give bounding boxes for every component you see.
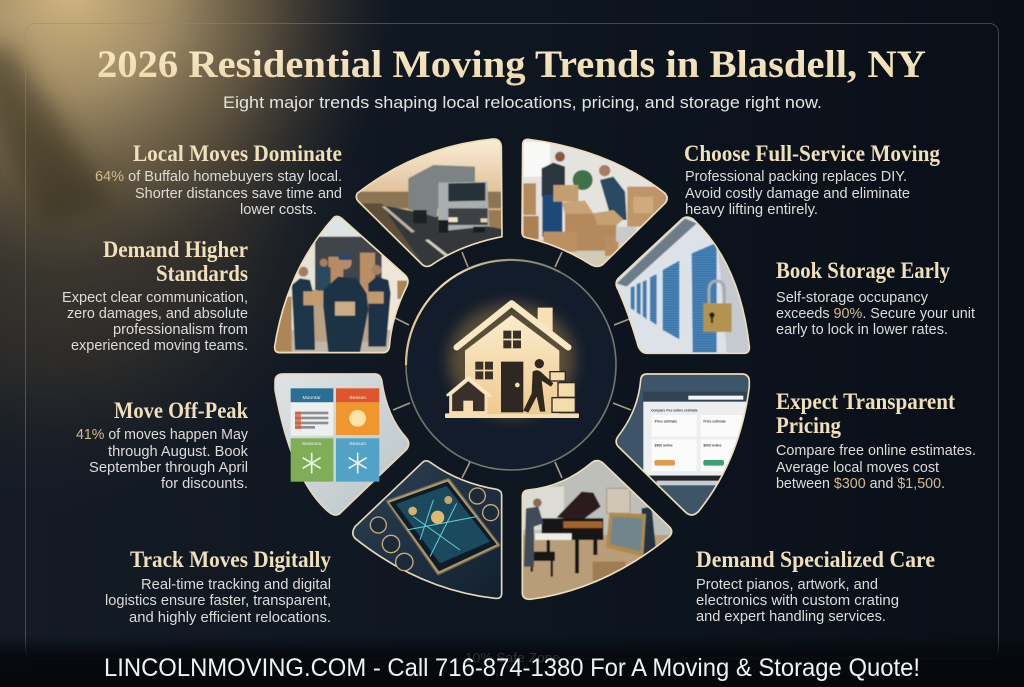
panel: seasonal calendar: Season	[349, 441, 366, 447]
text block: Local Moves Dominate	[95, 141, 342, 218]
panel: online estimates laptop: Compare free online estimate	[651, 408, 698, 412]
text block: Choose Full-Service Moving: Professional packing replaces DIY.	[685, 169, 907, 185]
faint safe zone label: 10% Safe Zone	[465, 650, 560, 665]
text block: Book Storage Early: exceeds 90%. Secure your unit	[776, 306, 975, 322]
text block: Choose Full-Service Moving: Avoid costly damage and eliminate	[685, 186, 910, 202]
panel: online estimates laptop: Price estimate	[703, 419, 726, 423]
text block: Demand Higher Standards: Standards	[156, 261, 248, 286]
text block: Demand Specialized Care: electronics with custom crating	[696, 593, 899, 609]
text block: Move Off-Peak: for discounts.	[161, 476, 248, 492]
text block: Expect Transparent Pricing: Pricing	[776, 413, 841, 438]
text block: Book Storage Early: early to lock in lower rates.	[776, 322, 948, 338]
text block: Demand Higher Standards: professionalism from	[113, 322, 248, 338]
footer band	[0, 635, 1024, 687]
central circle with connector spokes	[393, 252, 632, 478]
panel: seasonal calendar: Moontar	[303, 395, 321, 401]
panel: online estimates laptop	[613, 373, 753, 517]
text block: Book Storage Early	[776, 258, 975, 338]
text block: Track Moves Digitally: and highly efficient relocations.	[129, 610, 331, 626]
text block: Demand Specialized Care: Demand Specialized Care	[696, 547, 935, 572]
footer call to action: LINCOLNMOVING.COM - Call 716-874-1380 For A Moving & Storage Quote!	[104, 654, 920, 682]
text block: Choose Full-Service Moving: Choose Full-Service Moving	[684, 141, 940, 166]
text block: Demand Higher Standards: zero damages, and absolute	[67, 306, 248, 322]
text block: Expect Transparent Pricing: Expect Transparent	[776, 389, 955, 414]
text block: Choose Full-Service Moving	[684, 141, 940, 218]
text block: Demand Specialized Care: and expert handling services.	[696, 609, 886, 625]
stacked boxes	[550, 372, 575, 412]
text block: Expect Transparent Pricing: between $300 and $1,500.	[776, 476, 945, 492]
panel: seasonal calendar: Seasons	[302, 441, 322, 447]
mover figure	[523, 359, 553, 413]
text block: Demand Higher Standards: Demand Higher	[103, 237, 248, 262]
subtitle: Eight major trends shaping local relocations, pricing, and storage right now.	[223, 93, 822, 112]
text block: Track Moves Digitally: Real-time tracking and digital	[141, 577, 331, 593]
panel: packing photo	[520, 137, 670, 270]
text block: Move Off-Peak: 41% of moves happen May	[76, 427, 249, 443]
text block: Book Storage Early: Book Storage Early	[776, 258, 950, 283]
text block: Book Storage Early: Self-storage occupancy	[776, 290, 929, 306]
text block: Demand Higher Standards	[62, 237, 248, 354]
panel: moving crew photo	[273, 213, 412, 355]
panel: digital tracking tablet	[353, 461, 502, 598]
text block: Local Moves Dominate: Shorter distances save time and	[135, 186, 342, 202]
text block: Local Moves Dominate: lower costs.	[240, 202, 317, 218]
panel: piano and artwork photo	[520, 458, 677, 603]
text block: Expect Transparent Pricing: Compare free online estimates.	[776, 443, 976, 459]
text block: Local Moves Dominate: 64% of Buffalo homebuyers stay local.	[95, 169, 342, 185]
text block: Track Moves Digitally: logistics ensure faster, transparent,	[105, 593, 331, 609]
panel: online estimates laptop: Price estimate	[655, 419, 677, 423]
icon: glowing house with mover	[445, 303, 579, 418]
text block: Expect Transparent Pricing	[776, 389, 976, 492]
text block: Move Off-Peak: September through April	[89, 460, 248, 476]
title: 2026 Residential Moving Trends in Blasdell, NY	[97, 43, 926, 86]
panel: online estimates laptop: $900 online	[655, 443, 673, 447]
text block: Move Off-Peak: Move Off-Peak	[114, 398, 248, 423]
text block: Track Moves Digitally: Track Moves Digitally	[130, 547, 331, 572]
text block: Local Moves Dominate: Local Moves Dominate	[133, 141, 342, 166]
panel: online estimates laptop: $900 online	[703, 443, 722, 447]
text block: Demand Higher Standards: experienced moving teams.	[71, 338, 248, 354]
panel: seasonal calendar: Season	[349, 395, 366, 401]
text block: Choose Full-Service Moving: heavy lifting entirely.	[685, 202, 818, 218]
text block: Move Off-Peak: through August. Book	[108, 444, 249, 460]
panel: storage units photo	[613, 215, 753, 355]
text block: Expect Transparent Pricing: Average local moves cost	[776, 460, 939, 476]
text block: Demand Higher Standards: Expect clear communication,	[62, 290, 248, 306]
panel: seasonal calendar	[275, 374, 409, 515]
text block: Demand Specialized Care	[696, 547, 935, 625]
text block: Demand Specialized Care: Protect pianos, artwork, and	[696, 577, 878, 593]
panel: truck photo	[353, 137, 503, 270]
small house	[448, 378, 490, 413]
text block: Move Off-Peak	[76, 398, 249, 492]
text block: Track Moves Digitally	[105, 547, 331, 626]
